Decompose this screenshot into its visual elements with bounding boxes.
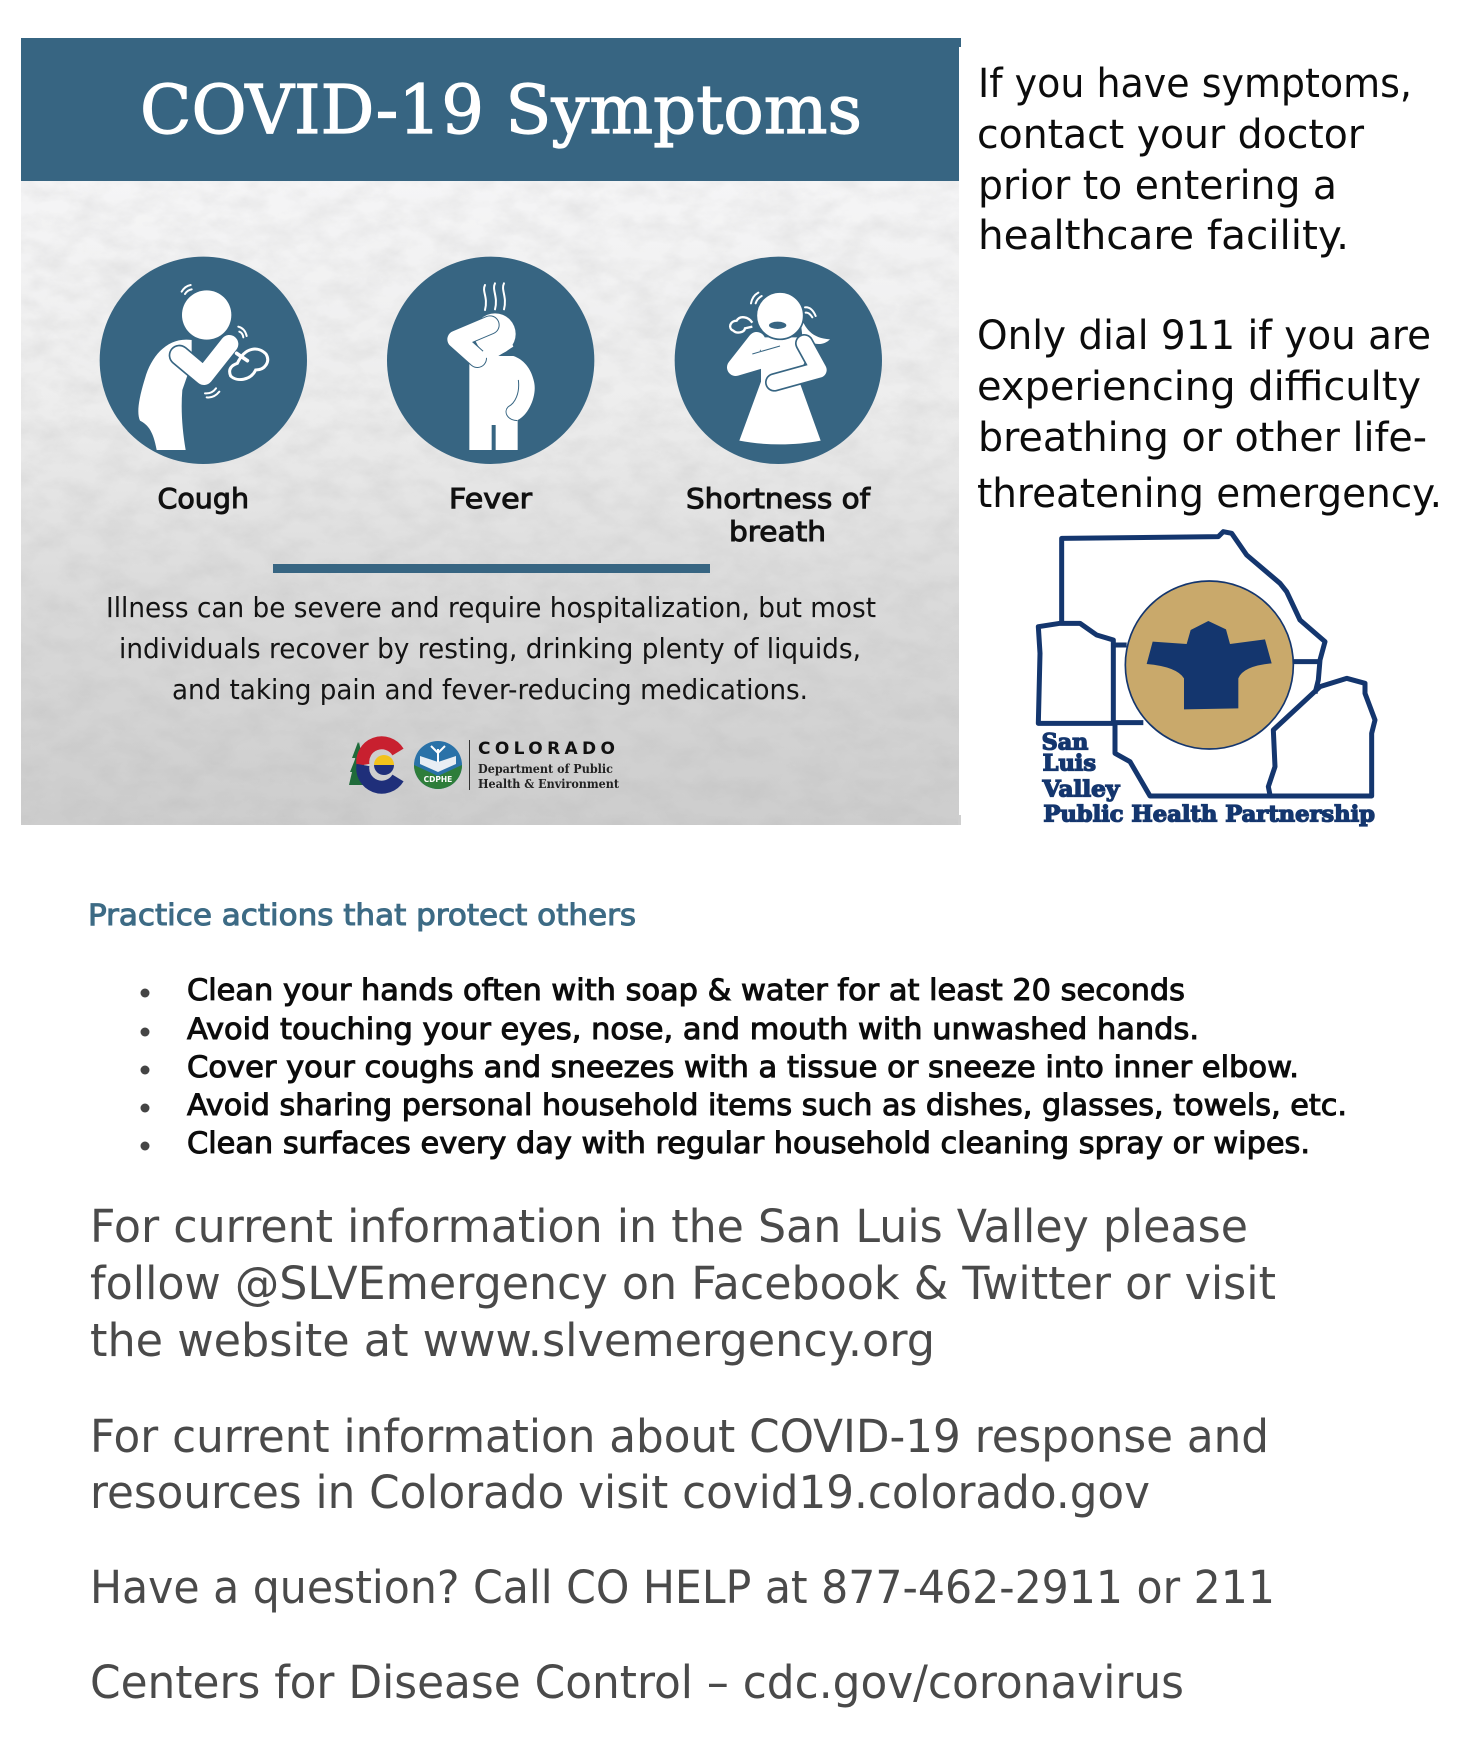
text block: CO HELP phone: Have a question? Call CO HELP at 877-462-2911 or 211: [90, 1561, 1275, 1614]
label: fever: Fever: [449, 482, 533, 515]
text block: symptoms advice: If you have symptoms,: [978, 61, 1412, 107]
logo: Colorado CDPHE: [349, 739, 619, 791]
bullet list: Avoid touching your eyes, nose, and mouth with unwashed hands.: [187, 1012, 1199, 1046]
label: shortness of breath: [686, 482, 871, 548]
logo: San Luis Valley Public Health Partnership: [1038, 532, 1375, 828]
text block: San Luis Valley information: [90, 1200, 1276, 1367]
heading: practice actions: Practice actions that protect others: [88, 898, 636, 932]
bullet list: Clean your hands often with soap & water for at least 20 seconds: [187, 973, 1185, 1007]
divider bar: [273, 564, 710, 573]
header band: [21, 38, 961, 181]
bullet list: Cover your coughs and sneezes with a tissue or sneeze into inner elbow.: [187, 1050, 1299, 1084]
text block: Colorado information: resources in Colorado visit covid19.colorado.gov: [90, 1466, 1150, 1519]
logo: San Luis Valley Public Health Partnership: Luis: [1043, 751, 1096, 777]
illness description: and taking pain and fever-reducing medications.: [172, 673, 808, 706]
logo wordmark: COLORADO: [478, 739, 615, 759]
text block: symptoms advice: Only dial 911 if you are: [977, 313, 1431, 359]
logo wordmark: Health & Environment: [478, 776, 619, 791]
text block: CDC: Centers for Disease Control – cdc.gov/coronavirus: [90, 1656, 1184, 1709]
text block: symptoms advice: threatening emergency.: [977, 471, 1442, 517]
panel: COVID-19 symptoms card: [21, 38, 961, 825]
text block: symptoms advice: breathing or other life-: [978, 415, 1427, 461]
text block: symptoms advice: prior to entering a: [978, 163, 1337, 209]
illness description: [106, 591, 876, 706]
icon: fever: [387, 257, 594, 464]
icon: CDPHE seal: CDPHE: [424, 775, 452, 784]
text block: symptoms advice: experiencing difficulty: [977, 364, 1421, 410]
label: cough: Cough: [158, 482, 249, 515]
illness description: Illness can be severe and require hospitalization, but most: [106, 591, 876, 624]
text block: San Luis Valley information: follow @SLVEmergency on Facebook & Twitter or visit: [90, 1257, 1276, 1310]
logo: San Luis Valley Public Health Partnership: Public Health Partnership: [1043, 802, 1375, 828]
text block: Colorado information: For current information about COVID-19 response and: [90, 1410, 1269, 1463]
icon: Colorado C mark: [349, 742, 398, 787]
logo wordmark: Department of Public: [478, 761, 613, 776]
title: COVID-19 Symptoms: [140, 71, 862, 149]
text block: symptoms advice: healthcare facility.: [978, 213, 1349, 259]
logo wordmark: [478, 739, 619, 791]
text block: Colorado information: [90, 1410, 1269, 1519]
label: shortness of breath: breath: [729, 515, 826, 548]
card background: [21, 181, 961, 825]
bullet list: [140, 973, 1347, 1160]
logo: San Luis Valley Public Health Partnership: Valley: [1042, 777, 1121, 803]
logo: San Luis Valley Public Health Partnership: San: [1042, 729, 1088, 755]
icon: CDPHE seal: [414, 741, 462, 789]
icon: cough: [100, 257, 307, 464]
label: shortness of breath: Shortness of: [686, 482, 871, 515]
text block: San Luis Valley information: the website at www.slvemergency.org: [90, 1314, 935, 1367]
text block: San Luis Valley information: For current information in the San Luis Valley please: [90, 1200, 1248, 1253]
text block: symptoms advice: [977, 61, 1442, 517]
text block: symptoms advice: contact your doctor: [977, 112, 1365, 158]
bullet list: Clean surfaces every day with regular household cleaning spray or wipes.: [187, 1126, 1310, 1160]
bullet list: Avoid sharing personal household items such as dishes, glasses, towels, etc.: [187, 1088, 1347, 1122]
icon: shortness of breath: [675, 257, 882, 464]
illness description: individuals recover by resting, drinking plenty of liquids,: [119, 632, 861, 665]
